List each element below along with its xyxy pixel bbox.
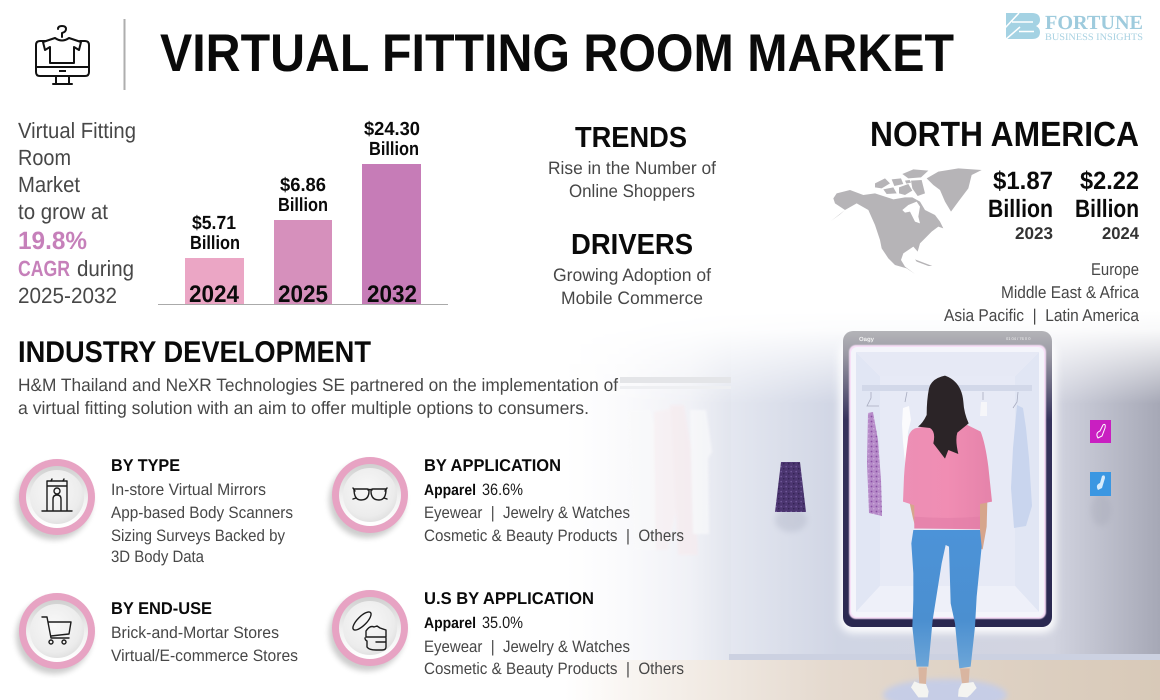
icon: monitor with shirt on hanger xyxy=(36,26,89,84)
by type block: BY TYPE xyxy=(111,456,180,475)
North America 2024 value: $2.22 xyxy=(1080,167,1139,195)
small hanger item xyxy=(980,402,987,416)
by application block: Apparel xyxy=(424,482,476,499)
other regions list: Middle East & Africa xyxy=(1001,283,1139,302)
industry development text: a virtual fitting solution with an aim to offer multiple options to consumers. xyxy=(18,398,589,418)
woman xyxy=(903,376,992,697)
CAGR text block: CAGR xyxy=(18,256,70,281)
app icon pink xyxy=(1090,420,1111,443)
bar 2025: 2025 xyxy=(278,281,328,308)
by type block: Sizing Surveys Backed by xyxy=(111,527,286,545)
icon: cosmetic jar badge xyxy=(329,590,408,671)
by end-use block: Brick-and-Mortar Stores xyxy=(111,624,279,642)
trends block: TRENDS xyxy=(575,122,687,154)
map: North America xyxy=(831,168,982,274)
bar 2025 xyxy=(274,175,332,308)
hangers xyxy=(867,392,1018,408)
icon: glasses badge xyxy=(329,457,408,538)
bar 2024: 2024 xyxy=(189,281,240,308)
skirt shadow xyxy=(775,508,807,532)
wall with top fade xyxy=(643,332,1160,660)
CAGR text block: Room xyxy=(18,145,71,170)
trends block: Rise in the Number of xyxy=(548,158,717,178)
arctic islands xyxy=(875,169,928,196)
app icon pink glyph xyxy=(1097,424,1105,438)
white top on rail xyxy=(902,406,911,472)
logo: Fortune Business Insights xyxy=(1005,12,1143,43)
mirror frame xyxy=(843,331,1052,627)
drivers block: Growing Adoption of xyxy=(553,265,712,285)
jeans xyxy=(911,530,982,697)
app icon blue shadow xyxy=(1091,494,1111,526)
CAGR text block: to grow at xyxy=(18,199,108,224)
by type block: In-store Virtual Mirrors xyxy=(111,481,266,499)
drivers block: Mobile Commerce xyxy=(561,288,703,308)
baseboard xyxy=(729,654,1160,660)
U.S by application block: 35.0% xyxy=(482,614,523,632)
floor light reflection xyxy=(883,679,1007,700)
U.S by application block: Cosmetic & Beauty Products | Others xyxy=(424,660,684,678)
other regions list xyxy=(944,260,1139,325)
faded hanging clothes xyxy=(628,405,712,555)
North America 2024 value: Billion xyxy=(1075,195,1139,223)
app icon blue glyph xyxy=(1097,475,1105,490)
bar chart xyxy=(158,119,448,308)
by type block: 3D Body Data xyxy=(111,548,205,566)
industry development text xyxy=(18,375,619,418)
by application block: Eyewear | Jewelry & Watches xyxy=(424,504,630,522)
sweater hem xyxy=(914,517,980,529)
U.S by application block: Eyewear | Jewelry & Watches xyxy=(424,638,630,656)
clothes rail xyxy=(862,385,1032,391)
North America 2024 value xyxy=(1075,167,1140,243)
U.S by application block: Apparel xyxy=(424,615,476,632)
purple dress on rail xyxy=(867,412,882,516)
mirror brand text: Oagy xyxy=(859,336,875,343)
U.S by application block xyxy=(424,589,684,678)
by end-use block xyxy=(111,599,298,665)
North America 2024 value: 2024 xyxy=(1102,224,1140,243)
industry development heading: INDUSTRY DEVELOPMENT xyxy=(18,336,371,369)
CAGR text block: Virtual Fitting xyxy=(18,118,136,143)
bar 2032 xyxy=(362,119,421,308)
photo: woman at virtual mirror xyxy=(603,331,1160,700)
clothes rail left xyxy=(620,377,731,389)
by application block: Cosmetic & Beauty Products | Others xyxy=(424,527,684,545)
other regions list: Europe xyxy=(1091,260,1139,279)
logo tagline: BUSINESS INSIGHTS xyxy=(1045,32,1143,43)
hudson bay xyxy=(902,202,920,223)
skirt on wall xyxy=(775,462,806,512)
title: VIRTUAL FITTING ROOM MARKET xyxy=(160,24,954,83)
bar 2032: $24.30 xyxy=(364,119,420,140)
bar 2024: Billion xyxy=(190,233,240,254)
North America 2023 value: $1.87 xyxy=(993,167,1053,195)
by application block: BY APPLICATION xyxy=(424,456,561,475)
bar 2025: $6.86 xyxy=(280,175,326,196)
mirror status text: 01 04 / 76 0 0 xyxy=(1006,336,1031,341)
CAGR text block xyxy=(18,118,136,308)
mirror glow xyxy=(839,340,1056,633)
ankles xyxy=(918,667,970,684)
drivers block: DRIVERS xyxy=(571,229,693,261)
by type block: App-based Body Scanners xyxy=(111,504,293,522)
icon: shopping cart badge xyxy=(16,593,95,674)
industry development text: H&M Thailand and NeXR Technologies SE partnered on the implementation of xyxy=(18,375,619,395)
bar 2032: 2032 xyxy=(367,281,417,308)
bar 2024: $5.71 xyxy=(192,213,236,234)
by application block: 36.6% xyxy=(482,481,523,499)
app icon blue xyxy=(1090,472,1111,496)
wooden floor xyxy=(565,660,1160,700)
logo wordmark: FORTUNE xyxy=(1045,12,1143,34)
shoes xyxy=(911,681,977,697)
North America 2023 value: 2023 xyxy=(1015,224,1053,243)
trends block: Online Shoppers xyxy=(569,181,695,201)
other regions list: Asia Pacific | Latin America xyxy=(944,306,1139,325)
pink sweater xyxy=(903,425,992,529)
CAGR text block: 2025-2032 xyxy=(18,283,117,308)
by application block xyxy=(424,456,684,545)
U.S by application block: U.S BY APPLICATION xyxy=(424,589,594,608)
CAGR text block: 19.8% xyxy=(18,227,87,255)
by type block xyxy=(111,456,293,566)
blue dress on rail xyxy=(1011,405,1032,528)
CAGR text block: during xyxy=(77,256,134,281)
by end-use block: Virtual/E-commerce Stores xyxy=(111,647,298,665)
North America 2023 value: Billion xyxy=(988,195,1053,223)
North America 2023 value xyxy=(988,167,1053,243)
hair xyxy=(918,376,969,459)
by end-use block: BY END-USE xyxy=(111,599,212,618)
logo mark xyxy=(1005,13,1040,40)
icon: body scanner badge xyxy=(16,459,95,540)
bar 2032: Billion xyxy=(369,139,419,160)
CAGR text block: Market xyxy=(18,172,80,197)
trends block xyxy=(548,122,717,201)
greenland xyxy=(927,168,982,212)
cuba xyxy=(915,259,932,266)
region heading: NORTH AMERICA xyxy=(870,115,1139,154)
drivers block xyxy=(553,229,712,308)
bar 2024 xyxy=(185,213,244,308)
arms xyxy=(909,502,987,549)
mirror screen xyxy=(849,345,1046,619)
bar 2025: Billion xyxy=(278,195,328,216)
header divider xyxy=(124,19,126,90)
